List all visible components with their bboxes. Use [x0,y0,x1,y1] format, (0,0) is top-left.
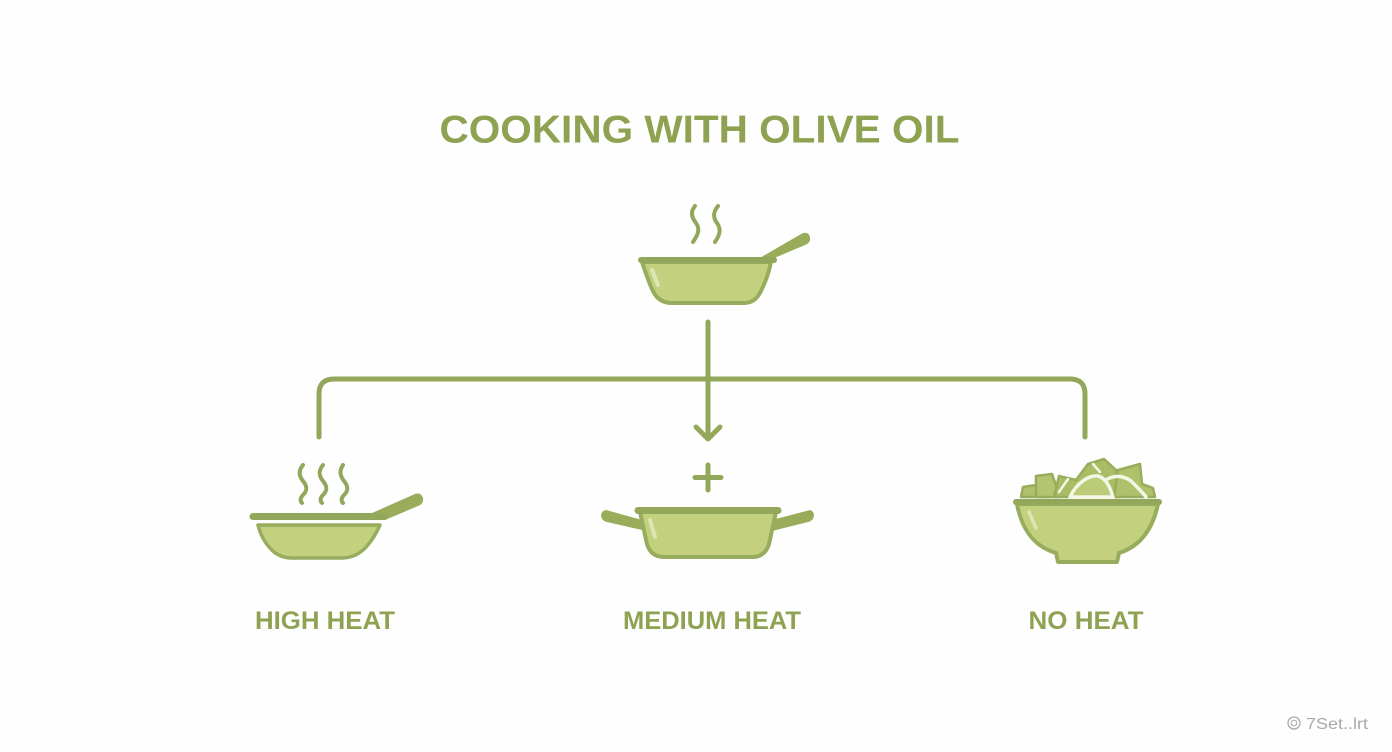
label: medium heat: MEDIUM HEAT [623,607,801,635]
icon: plus sign [695,465,721,490]
label: no heat: NO HEAT [1028,607,1144,635]
icon: high heat pan with steam [253,465,423,558]
watermark [1288,716,1369,733]
icon: top frying pan with steam [641,206,810,303]
arrow: down to medium heat [696,322,720,439]
icon: salad bowl [1016,459,1159,562]
icon: medium heat pot [601,510,814,557]
watermark: 7Set..lrt [1306,716,1369,733]
label: high heat: HIGH HEAT [255,607,395,635]
connector: branching lines [319,379,1085,437]
title: COOKING WITH OLIVE OIL [440,108,960,152]
